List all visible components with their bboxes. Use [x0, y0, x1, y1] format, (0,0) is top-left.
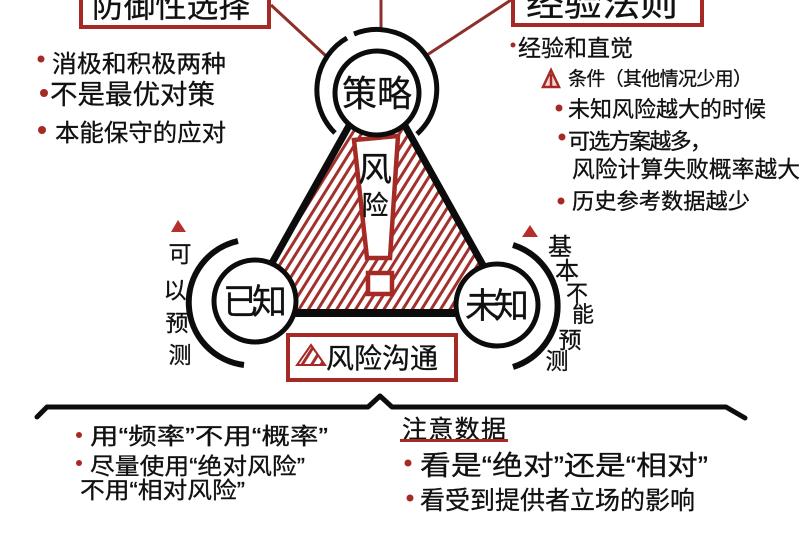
label: predictable: 测: [168, 342, 192, 368]
node: strategy: [317, 30, 437, 135]
list: rule of thumb notes: [510, 35, 800, 214]
list: rule of thumb notes: 历史参考数据越少: [572, 189, 750, 214]
list: communication tips: [76, 423, 328, 503]
label: predictable: 以: [164, 277, 186, 303]
label: predictable: 可: [168, 241, 192, 267]
list: communication tips: 尽量使用“绝对风险”: [90, 453, 305, 479]
list: communication tips: 不用“相对风险”: [80, 477, 245, 503]
label: basically unpredictable: 不: [566, 281, 588, 306]
box: rule of thumb: [513, 0, 702, 25]
connector lines from strategy to top boxes: [271, 0, 511, 56]
list: rule of thumb notes: 条件（其他情况少用）: [568, 68, 752, 90]
list: watch the data: 看受到提供者立场的影响: [420, 487, 695, 515]
label: predictable: 预: [166, 310, 188, 336]
label: basically unpredictable: 能: [572, 302, 594, 327]
brace divider: [37, 396, 745, 418]
list: defensive choice notes: 不是最优对策: [50, 80, 215, 110]
label: basically unpredictable: [522, 225, 594, 374]
list: rule of thumb notes: 风险计算失败概率越大: [572, 156, 800, 182]
list: defensive choice notes: 消极和积极两种: [52, 51, 226, 78]
triangle with hatched risk area: [270, 122, 486, 313]
label: basically unpredictable: 基: [548, 234, 572, 261]
icon: warning triangle: [543, 70, 559, 87]
list: defensive choice notes: [38, 51, 226, 147]
label: basically unpredictable: 本: [555, 258, 579, 285]
node: known: 已知: [223, 283, 287, 322]
list: rule of thumb notes: 未知风险越大的时候: [568, 97, 766, 122]
list: rule of thumb notes: 可选方案越多，: [568, 129, 712, 154]
label: predictable: [164, 220, 192, 368]
box: risk communication: [288, 335, 456, 380]
exclamation mark: risk: 风: [358, 151, 392, 189]
node: unknown: [456, 245, 558, 367]
node: strategy: 策略: [342, 73, 412, 114]
icon: hatched warning triangle: [297, 345, 325, 365]
label: basically unpredictable: 预: [558, 327, 582, 353]
node: unknown: 未知: [465, 287, 529, 326]
label: basically unpredictable: 测: [546, 348, 568, 374]
icon: red marker: [171, 220, 186, 232]
icon: red marker: [522, 225, 538, 237]
list: defensive choice notes: 本能保守的应对: [55, 120, 226, 147]
exclamation mark: risk: [354, 136, 398, 294]
node: known: [189, 241, 296, 365]
list: watch the data: 看是“绝对”还是“相对”: [420, 451, 708, 481]
list: watch the data: 注意数据: [402, 416, 506, 444]
list: communication tips: 用“频率”不用“概率”: [90, 423, 328, 449]
list: rule of thumb notes: 经验和直觉: [518, 35, 633, 61]
exclamation mark: risk: 险: [362, 191, 388, 221]
box: risk communication: 风险沟通: [326, 343, 438, 374]
list: watch the data: [400, 416, 708, 515]
